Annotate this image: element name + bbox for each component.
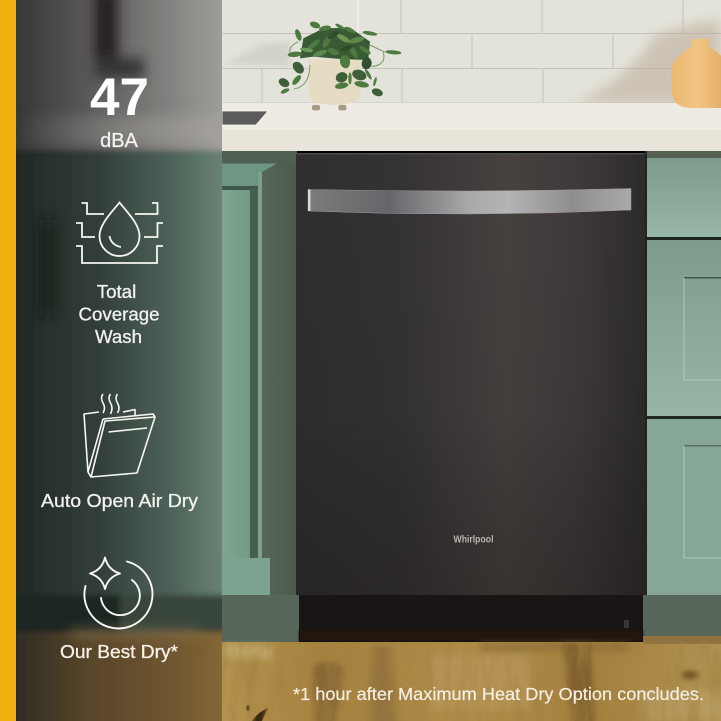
brand logo: Whirlpool — [454, 534, 494, 546]
unit dBA: dBA — [100, 130, 139, 152]
orange vase — [671, 39, 721, 108]
cabinet door panel — [222, 190, 250, 558]
icon: water drop in basin — [76, 202, 163, 263]
yellow accent bar — [0, 0, 16, 721]
dark foliage mass — [300, 28, 370, 60]
floor streaks — [222, 642, 720, 721]
value 47: 47 — [90, 68, 149, 127]
countertop — [222, 103, 721, 151]
wood floor — [222, 636, 721, 721]
feature: our best dry — [60, 558, 178, 662]
lower drawer — [647, 419, 721, 595]
feature: auto open air dry — [41, 394, 199, 511]
floor grain — [222, 642, 721, 721]
label: our best dry: Our Best Dry* — [60, 641, 178, 662]
label: total coverage wash: Coverage — [78, 304, 160, 324]
plant pot — [308, 59, 361, 105]
frosted side panel — [10, 0, 230, 721]
label: auto open air dry: Auto Open Air Dry — [41, 490, 199, 511]
footnote: *1 hour after Maximum Heat Dry Option concludes. — [293, 684, 704, 704]
feature: 47 dBA — [90, 68, 149, 152]
cabinet top rail — [222, 164, 277, 186]
left cabinet plinth — [222, 595, 299, 642]
toe kick — [299, 595, 643, 632]
dishwasher — [296, 153, 645, 642]
plant stems — [290, 42, 385, 89]
cabinet stile — [222, 151, 297, 596]
left cabinet — [222, 151, 299, 642]
right cabinet — [643, 151, 721, 640]
dishwasher door — [296, 153, 645, 595]
kitchen backsplash — [222, 0, 721, 104]
potted plant — [277, 20, 401, 110]
sink opening — [222, 111, 268, 125]
label: total coverage wash: Wash — [95, 326, 142, 347]
right cabinet plinth — [643, 595, 721, 636]
icon: open dishwasher with steam — [84, 394, 155, 477]
feature: total coverage wash — [76, 202, 163, 347]
label: total coverage wash: Total — [97, 281, 136, 302]
blurred background shapes — [35, 0, 216, 641]
top drawer — [647, 158, 721, 237]
label: total coverage wash — [78, 281, 160, 347]
leaves — [277, 20, 401, 98]
middle drawer — [647, 240, 721, 416]
floor knot — [252, 708, 268, 721]
icon: sparkle and plate — [84, 558, 152, 628]
door handle — [308, 188, 631, 214]
